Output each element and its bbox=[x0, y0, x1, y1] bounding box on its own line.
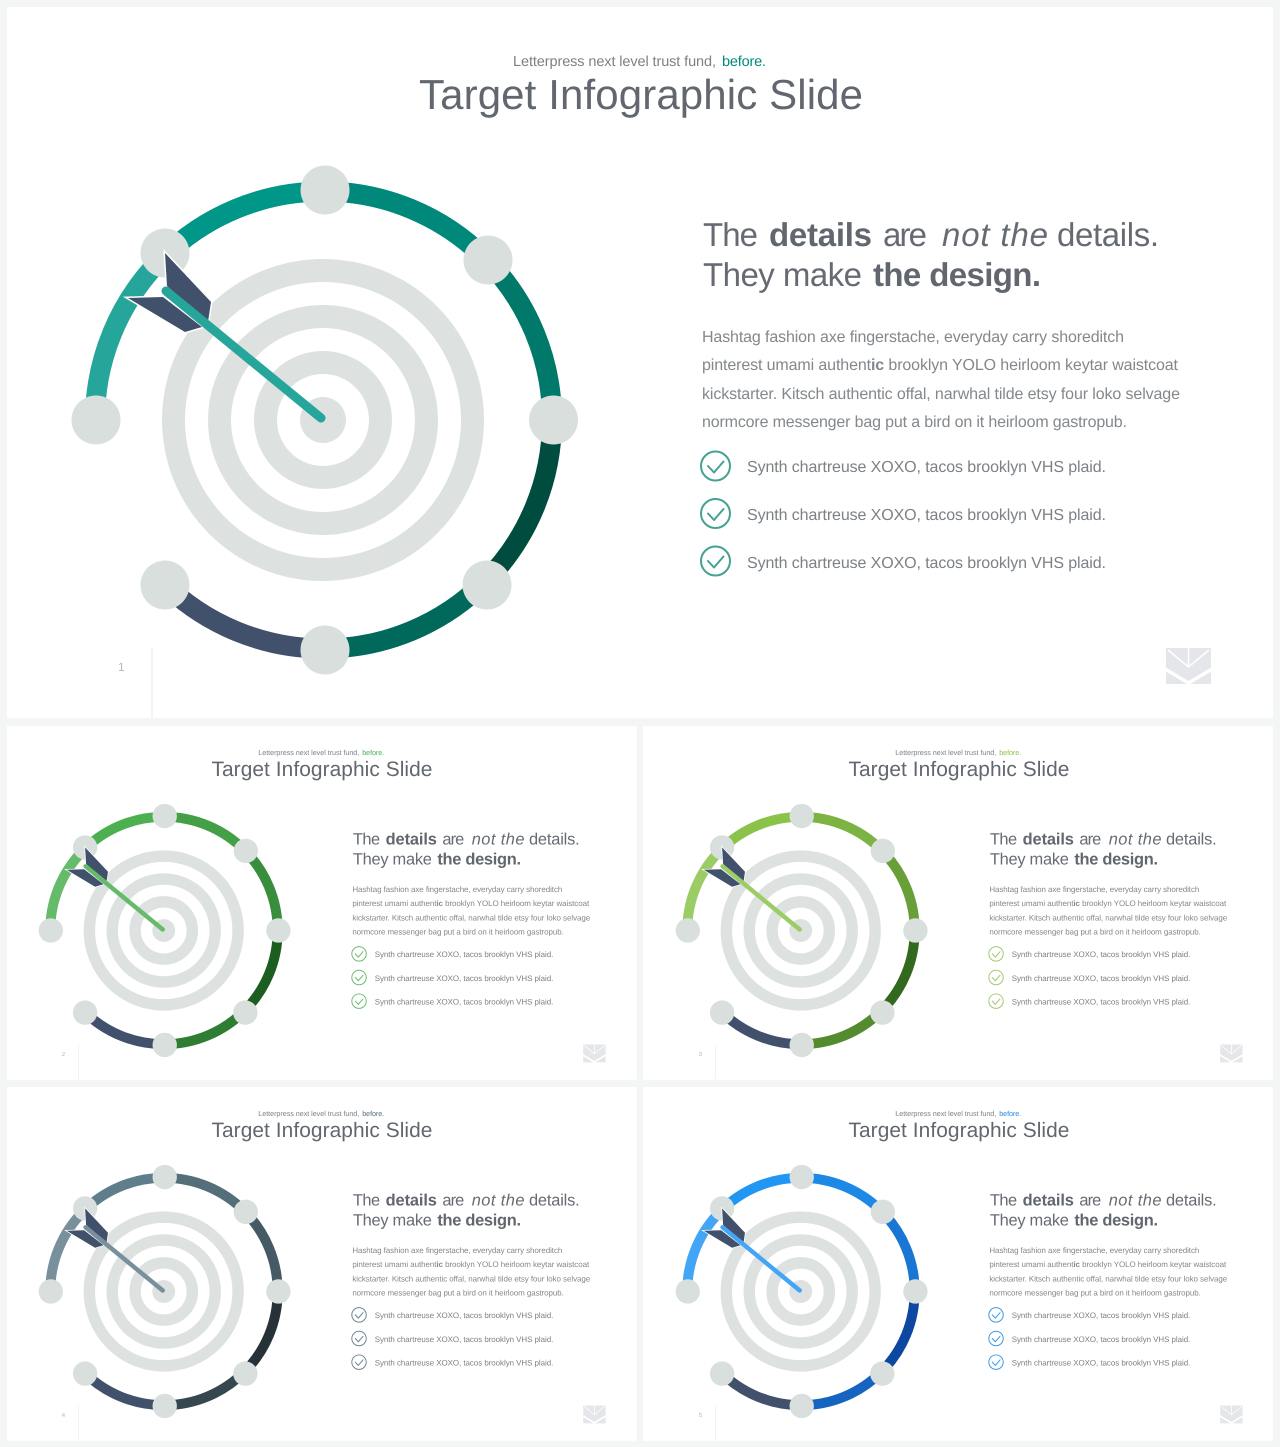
title: Target Infographic Slide bbox=[848, 1118, 1069, 1142]
target diagram bbox=[39, 1165, 291, 1418]
heading: details. bbox=[1057, 216, 1159, 253]
check item 1: Synth chartreuse XOXO, tacos brooklyn VHS plaid. bbox=[1012, 950, 1190, 959]
subtitle: Letterpress next level trust fund, bbox=[513, 54, 716, 70]
check item 3: Synth chartreuse XOXO, tacos brooklyn VHS plaid. bbox=[1012, 998, 1190, 1007]
body paragraph: Hashtag fashion axe fingerstache, everyday carry shoreditch bbox=[989, 886, 1199, 894]
heading: the design. bbox=[437, 1210, 521, 1229]
subtitle: before. bbox=[362, 749, 384, 757]
title: Target Infographic Slide bbox=[211, 1118, 432, 1142]
heading: details. bbox=[1166, 829, 1217, 848]
subtitle: before. bbox=[722, 54, 766, 70]
arrow bbox=[704, 1208, 800, 1290]
ring nodes bbox=[39, 1165, 291, 1418]
heading bbox=[703, 216, 1159, 293]
check item 3: Synth chartreuse XOXO, tacos brooklyn VHS plaid. bbox=[375, 998, 553, 1007]
title: Target Infographic Slide bbox=[211, 757, 432, 781]
target diagram bbox=[676, 1165, 928, 1418]
heading: The bbox=[990, 829, 1017, 848]
check item 3: Synth chartreuse XOXO, tacos brooklyn VHS plaid. bbox=[1012, 1359, 1190, 1368]
body paragraph: kickstarter. Kitsch authentic offal, narwhal tilde etsy four loko selvage bbox=[989, 1275, 1227, 1284]
subtitle: before. bbox=[362, 1110, 384, 1118]
segmented progress ring bbox=[687, 1178, 915, 1405]
body paragraph: pinterest umami authentic brooklyn YOLO heirloom keytar waistcoat bbox=[989, 900, 1226, 908]
page number: 3 bbox=[699, 1050, 702, 1057]
ring nodes bbox=[676, 1165, 928, 1418]
heading bbox=[990, 829, 1217, 868]
target diagram bbox=[72, 166, 578, 674]
body paragraph: kickstarter. Kitsch authentic offal, narwhal tilde etsy four loko selvage bbox=[989, 914, 1227, 923]
heading: are bbox=[442, 829, 464, 848]
segmented progress ring bbox=[50, 817, 278, 1044]
body paragraph: Hashtag fashion axe fingerstache, everyday carry shoreditch bbox=[702, 329, 1124, 346]
slide 5: blue target bbox=[643, 1087, 1273, 1441]
slide panel background bbox=[643, 726, 1273, 1080]
check item 1: Synth chartreuse XOXO, tacos brooklyn VHS plaid. bbox=[1012, 1311, 1190, 1320]
heading: details bbox=[386, 1190, 437, 1209]
body paragraph: normcore messenger bag put a bird on it heirloom gastropub. bbox=[352, 1289, 564, 1297]
heading: are bbox=[1079, 1190, 1101, 1209]
page number: 1 bbox=[118, 660, 125, 674]
bullseye rings bbox=[89, 856, 238, 1005]
target diagram bbox=[39, 804, 291, 1057]
bullseye rings bbox=[726, 856, 875, 1005]
slide panel background bbox=[643, 1087, 1273, 1441]
check item 2: Synth chartreuse XOXO, tacos brooklyn VHS plaid. bbox=[1012, 1335, 1190, 1344]
body paragraph: pinterest umami authentic brooklyn YOLO heirloom keytar waistcoat bbox=[989, 1261, 1226, 1269]
slide 4: slate target bbox=[7, 1087, 637, 1441]
check item 3 bbox=[701, 546, 1106, 576]
check item 1 bbox=[989, 1308, 1190, 1322]
body paragraph: normcore messenger bag put a bird on it heirloom gastropub. bbox=[989, 1289, 1201, 1297]
bullseye rings bbox=[89, 1217, 238, 1366]
heading: details bbox=[769, 216, 872, 253]
check item 1 bbox=[352, 1308, 553, 1322]
check item 2: Synth chartreuse XOXO, tacos brooklyn VHS plaid. bbox=[375, 974, 553, 983]
check item 3: Synth chartreuse XOXO, tacos brooklyn VHS plaid. bbox=[375, 1359, 553, 1368]
body paragraph: Hashtag fashion axe fingerstache, everyday carry shoreditch bbox=[989, 1247, 1199, 1255]
title: Target Infographic Slide bbox=[419, 71, 863, 118]
check item 2 bbox=[989, 1331, 1190, 1346]
body paragraph: normcore messenger bag put a bird on it heirloom gastropub. bbox=[989, 928, 1201, 936]
heading: The bbox=[990, 1190, 1017, 1209]
heading: details. bbox=[1166, 1190, 1217, 1209]
icon: logo mark bbox=[583, 1044, 606, 1062]
body paragraph: kickstarter. Kitsch authentic offal, narwhal tilde etsy four loko selvage bbox=[352, 1275, 590, 1284]
check item 2: Synth chartreuse XOXO, tacos brooklyn VHS plaid. bbox=[1012, 974, 1190, 983]
heading: not the bbox=[1109, 829, 1161, 848]
page number: 4 bbox=[62, 1411, 65, 1418]
slide panel background bbox=[7, 1087, 637, 1441]
ring nodes bbox=[39, 804, 291, 1057]
heading bbox=[990, 1190, 1217, 1229]
checklist bbox=[989, 947, 1190, 1008]
heading: They make bbox=[353, 849, 432, 868]
body paragraph: normcore messenger bag put a bird on it heirloom gastropub. bbox=[702, 414, 1127, 431]
check item 2 bbox=[352, 970, 553, 985]
check item 1 bbox=[701, 452, 1106, 480]
checklist bbox=[701, 452, 1106, 576]
bullseye rings bbox=[726, 1217, 875, 1366]
icon: logo mark bbox=[1165, 647, 1212, 684]
body paragraph bbox=[989, 886, 1227, 936]
check item 1 bbox=[989, 947, 1190, 961]
heading: the design. bbox=[437, 849, 521, 868]
check item 2 bbox=[701, 499, 1106, 528]
heading: They make bbox=[990, 849, 1069, 868]
heading: details bbox=[1023, 1190, 1074, 1209]
slide panel background bbox=[7, 7, 1273, 718]
check item 3 bbox=[989, 994, 1190, 1008]
body paragraph: kickstarter. Kitsch authentic offal, narwhal tilde etsy four loko selvage bbox=[702, 386, 1180, 403]
page number: 5 bbox=[699, 1411, 702, 1418]
segmented progress ring bbox=[50, 1178, 278, 1405]
check item 1: Synth chartreuse XOXO, tacos brooklyn VHS plaid. bbox=[375, 1311, 553, 1320]
subtitle: before. bbox=[999, 1110, 1021, 1118]
heading: are bbox=[442, 1190, 464, 1209]
heading: They make bbox=[703, 256, 862, 293]
slide 1: teal target bbox=[7, 7, 1273, 718]
body paragraph: pinterest umami authentic brooklyn YOLO heirloom keytar waistcoat bbox=[352, 1261, 589, 1269]
body paragraph: normcore messenger bag put a bird on it heirloom gastropub. bbox=[352, 928, 564, 936]
body paragraph: Hashtag fashion axe fingerstache, everyday carry shoreditch bbox=[352, 886, 562, 894]
body paragraph: pinterest umami authentic brooklyn YOLO heirloom keytar waistcoat bbox=[702, 357, 1179, 374]
subtitle: Letterpress next level trust fund, bbox=[258, 749, 359, 757]
check item 3 bbox=[352, 1355, 553, 1369]
body paragraph bbox=[352, 1247, 590, 1297]
slide 3: light green target bbox=[643, 726, 1273, 1080]
ring nodes bbox=[72, 166, 578, 674]
check item 1: Synth chartreuse XOXO, tacos brooklyn VHS plaid. bbox=[747, 459, 1106, 476]
heading: the design. bbox=[873, 256, 1041, 293]
body paragraph bbox=[989, 1247, 1227, 1297]
subtitle: Letterpress next level trust fund, bbox=[258, 1110, 359, 1118]
heading: not the bbox=[472, 1190, 524, 1209]
heading: not the bbox=[472, 829, 524, 848]
arrow bbox=[67, 1208, 163, 1290]
segmented progress ring bbox=[95, 192, 552, 649]
segmented progress ring bbox=[687, 817, 915, 1044]
heading: not the bbox=[942, 216, 1048, 253]
body paragraph bbox=[702, 329, 1180, 431]
slide panel background bbox=[7, 726, 637, 1080]
heading: are bbox=[1079, 829, 1101, 848]
checklist bbox=[352, 1308, 553, 1369]
heading: the design. bbox=[1074, 849, 1158, 868]
heading: The bbox=[353, 829, 380, 848]
arrow bbox=[67, 847, 163, 929]
icon: logo mark bbox=[1220, 1405, 1243, 1423]
subtitle: before. bbox=[999, 749, 1021, 757]
check item 2 bbox=[352, 1331, 553, 1346]
check item 2 bbox=[989, 970, 1190, 985]
check item 2: Synth chartreuse XOXO, tacos brooklyn VHS plaid. bbox=[375, 1335, 553, 1344]
check item 3 bbox=[352, 994, 553, 1008]
heading: details bbox=[386, 829, 437, 848]
heading: The bbox=[703, 216, 758, 253]
slide 2: green target bbox=[7, 726, 637, 1080]
body paragraph bbox=[352, 886, 590, 936]
page number: 2 bbox=[62, 1050, 65, 1057]
heading: the design. bbox=[1074, 1210, 1158, 1229]
check item 3 bbox=[989, 1355, 1190, 1369]
icon: logo mark bbox=[583, 1405, 606, 1423]
heading: details bbox=[1023, 829, 1074, 848]
heading: The bbox=[353, 1190, 380, 1209]
check item 3: Synth chartreuse XOXO, tacos brooklyn VHS plaid. bbox=[747, 555, 1106, 572]
heading: They make bbox=[353, 1210, 432, 1229]
heading: not the bbox=[1109, 1190, 1161, 1209]
bullseye rings bbox=[174, 270, 472, 570]
heading: details. bbox=[529, 829, 580, 848]
checklist bbox=[352, 947, 553, 1008]
title: Target Infographic Slide bbox=[848, 757, 1069, 781]
arrow bbox=[704, 847, 800, 929]
icon: logo mark bbox=[1220, 1044, 1243, 1062]
heading bbox=[353, 1190, 580, 1229]
body paragraph: kickstarter. Kitsch authentic offal, narwhal tilde etsy four loko selvage bbox=[352, 914, 590, 923]
heading: details. bbox=[529, 1190, 580, 1209]
heading: They make bbox=[990, 1210, 1069, 1229]
checklist bbox=[989, 1308, 1190, 1369]
body paragraph: pinterest umami authentic brooklyn YOLO heirloom keytar waistcoat bbox=[352, 900, 589, 908]
arrow bbox=[128, 253, 321, 418]
heading bbox=[353, 829, 580, 868]
ring nodes bbox=[676, 804, 928, 1057]
check item 1 bbox=[352, 947, 553, 961]
subtitle: Letterpress next level trust fund, bbox=[895, 1110, 996, 1118]
heading: are bbox=[883, 216, 927, 253]
check item 2: Synth chartreuse XOXO, tacos brooklyn VHS plaid. bbox=[747, 507, 1106, 524]
body paragraph: Hashtag fashion axe fingerstache, everyday carry shoreditch bbox=[352, 1247, 562, 1255]
target diagram bbox=[676, 804, 928, 1057]
subtitle: Letterpress next level trust fund, bbox=[895, 749, 996, 757]
check item 1: Synth chartreuse XOXO, tacos brooklyn VHS plaid. bbox=[375, 950, 553, 959]
